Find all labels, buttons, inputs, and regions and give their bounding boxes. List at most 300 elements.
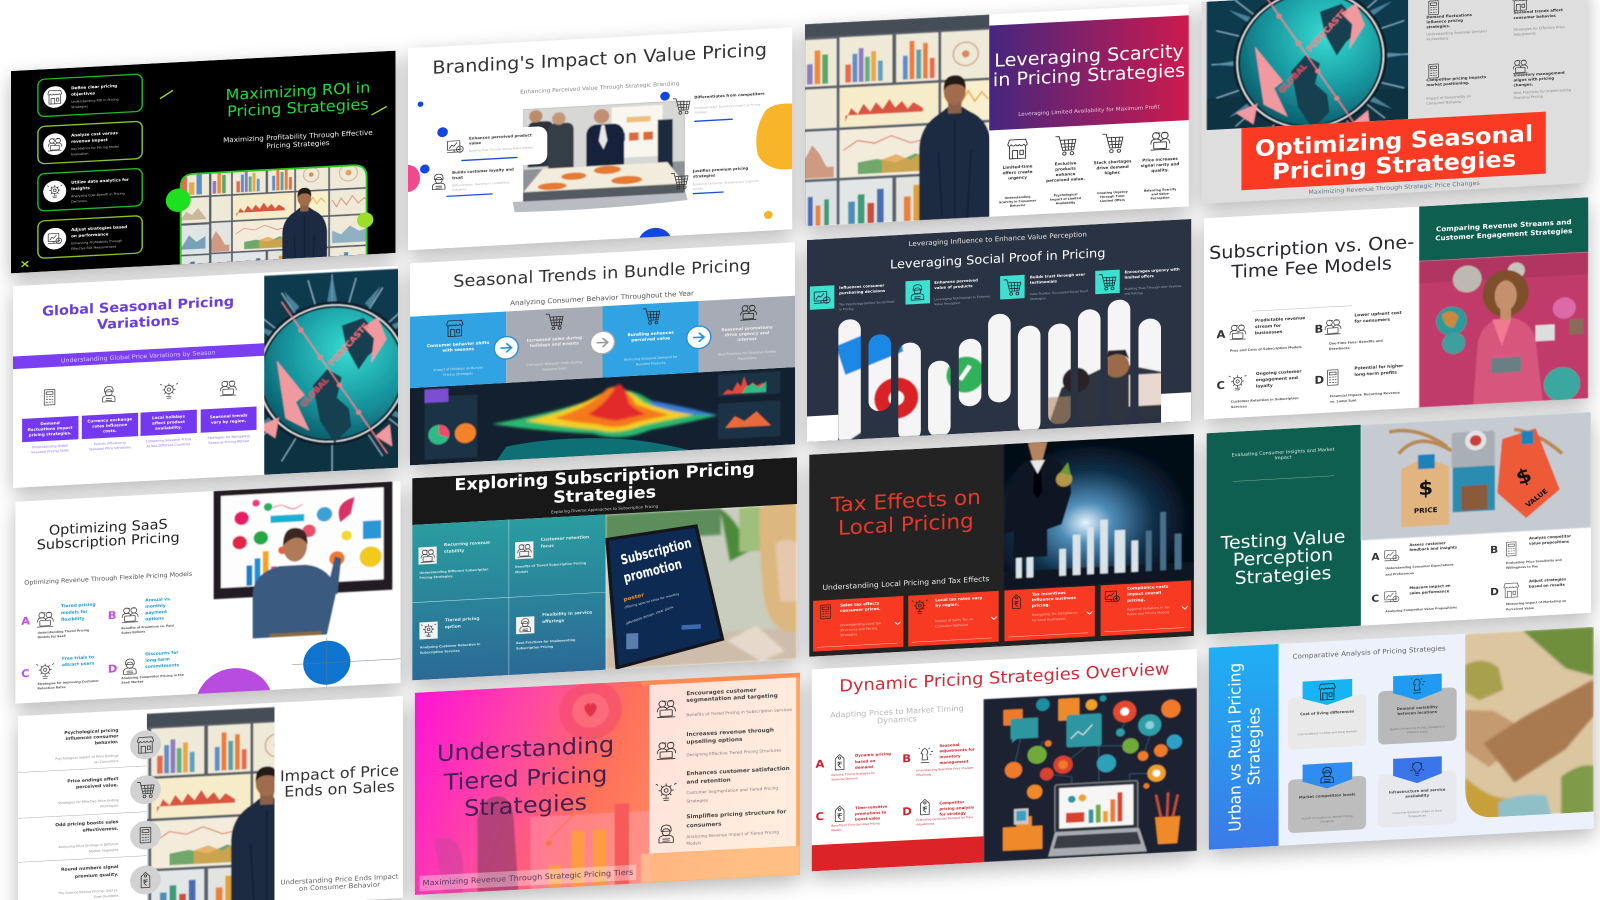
- price tag labels: [1414, 462, 1550, 515]
- strip: increased sales: Increased sales during: [527, 335, 582, 343]
- item A: flexibility: [61, 616, 85, 623]
- item C: attract users: [62, 661, 95, 668]
- red band: [812, 836, 984, 871]
- card: infrastructure: Perspectives: [1408, 813, 1427, 818]
- item B: Evaluating Price Sensitivity and: [1506, 558, 1562, 565]
- item A: [1216, 315, 1305, 354]
- item: simplifies: Analyzing Revenue Impact of Tiered Pricing: [686, 829, 779, 839]
- item D: [1490, 577, 1567, 612]
- card: local tax rates: Impact of Sales Tax on: [935, 617, 973, 623]
- item: builds trust: Builds trust through user: [1030, 273, 1085, 279]
- item: price increases: signal rarity and: [1141, 161, 1180, 168]
- strip: promotions: Best Practices for Seasonal Bundle: [718, 350, 776, 357]
- card: cost of living: Cost of living differences: [1300, 710, 1355, 716]
- title: Tiered Pricing: [443, 761, 607, 796]
- item: urgency: Encourages urgency with: [1125, 267, 1180, 274]
- item: demand fluctuations: Demand fluctuations: [1426, 13, 1473, 19]
- item: round numbers: Even Numbers: [94, 894, 119, 899]
- item: flexibility: Subscription Pricing: [516, 645, 553, 650]
- item: holidays: Across Different Countries: [147, 442, 191, 448]
- card: adjust strategies: Enhancing Profitability through: [71, 239, 122, 245]
- image: price and value tags: [1361, 412, 1591, 540]
- item: enhances: value of products: [934, 284, 973, 290]
- subtitle: Understanding Local Pricing and Tax Effects: [822, 574, 989, 592]
- item A: stream for: [1255, 323, 1282, 330]
- card: infrastructure: Infrastructure and service: [1389, 788, 1446, 795]
- strip: increased sales: [506, 306, 603, 383]
- item B: payment: [145, 609, 167, 616]
- title: Seasonal Trends in Bundle Pricing: [453, 256, 751, 292]
- item D: commitments: [145, 662, 180, 670]
- image: presenter at screen: [214, 481, 392, 641]
- subtitle: Pricing Strategies: [266, 139, 330, 150]
- item: differentiates: Differentiates from competitors: [694, 91, 765, 100]
- item: loyalty: Industries: [452, 187, 467, 192]
- item: seasonal trends: vary by region.: [211, 418, 247, 425]
- item: stock shortages: Through Time-: [1100, 194, 1126, 199]
- item C: [1216, 369, 1303, 410]
- image: woman in pink suit: [1419, 252, 1588, 409]
- item: stock shortages: drive demand: [1096, 164, 1129, 170]
- item C: C: [1216, 379, 1225, 392]
- item: currency: Currency exchange: [87, 416, 132, 424]
- item: seasonal trends: [201, 380, 257, 445]
- item: satisfaction: Customer Segmentation and Tiered Pricing: [686, 785, 778, 795]
- item B: Effectively: [916, 772, 932, 777]
- strip: promotions: interest: [737, 336, 757, 342]
- title: Subscription Pricing: [37, 530, 180, 553]
- image: globe: [1206, 0, 1408, 130]
- item: competitor pricing: Impact of Seasonality on: [1426, 94, 1471, 101]
- item A: A: [1216, 328, 1226, 341]
- item: flexibility: [516, 610, 592, 650]
- title: Pricing Strategies: [227, 96, 369, 121]
- strip: bundling: Bundling enhances: [627, 330, 674, 337]
- item: satisfaction: Strategies: [686, 798, 708, 804]
- item: holidays: affect product: [152, 419, 185, 426]
- card: market competition: Impact of Location on Market Pricing: [1302, 814, 1353, 820]
- header panel: Customer Engagement Strategies: [1435, 227, 1572, 242]
- strip: bundling: perceived value: [631, 335, 670, 342]
- card: adjust strategies: on performance: [71, 231, 109, 238]
- item: currency: [82, 385, 138, 452]
- slide: Leveraging Social Proof in Pricing: [807, 219, 1191, 447]
- slide: Optimizing Seasonal Pricing Strategies: [1202, 0, 1587, 204]
- title: Variations: [97, 313, 179, 333]
- left title panel: [1209, 644, 1279, 850]
- item A: Dynamic Pricing Strategies for: [831, 771, 876, 777]
- card: tax incentives: Navigating Tax Compliance: [1032, 611, 1077, 617]
- strip: bundling: [603, 301, 699, 378]
- price tag labels: $: [1512, 463, 1535, 490]
- image: businessman over glowing city: [1004, 434, 1194, 590]
- card: demand variability: Demand variability: [1397, 705, 1438, 711]
- item C: engagement and: [1256, 375, 1298, 383]
- item: simplifies: Simplifies pricing structure for: [686, 809, 786, 820]
- item: upselling: Increases revenue through: [686, 728, 774, 738]
- item A: [1371, 541, 1458, 577]
- item: influences: in Pricing: [839, 307, 854, 311]
- item C: Analyzing Competitor Value Propositions: [1385, 605, 1457, 613]
- item: flexibility: Flexibility in service: [542, 610, 592, 618]
- strip: increased sales: Seasonal Sales: [542, 366, 567, 372]
- item: odd pricing: Analyzing Price Endings in Different: [59, 842, 119, 849]
- item: limited-time: [999, 139, 1037, 208]
- title: Strategies: [464, 789, 587, 822]
- item B: value propositions: [1529, 540, 1570, 546]
- item: stock shortages: [1094, 133, 1132, 203]
- item B: [108, 596, 174, 636]
- item: currency: costs.: [103, 428, 117, 434]
- subtitle: Leveraging Limited Availability for Maximum Profit: [1018, 105, 1160, 118]
- item: limited-time: offers create: [1003, 169, 1033, 175]
- item: psychological: [55, 728, 119, 766]
- item: price endings: perceived value.: [76, 782, 119, 790]
- item: retention: focus: [541, 543, 554, 550]
- strip: consumer behavior: with seasons: [442, 346, 475, 353]
- title: Strategies: [1235, 563, 1331, 589]
- subtitle: Exploring Diverse Approaches to Subscription Pricing: [551, 504, 659, 514]
- item: recurring revenue: Pricing Strategies: [419, 574, 453, 580]
- item: psychological: Psychological Impact of Price Endings: [55, 754, 119, 761]
- item: perceived value: value: [469, 140, 481, 146]
- card: local tax rates: [908, 591, 999, 646]
- title: Leveraging Social Proof in Pricing: [890, 245, 1105, 272]
- card: define objectives: Define clear pricing: [71, 83, 117, 90]
- item: exclusive: enhance: [1056, 171, 1076, 177]
- arrow circles: [494, 325, 711, 360]
- circle with crosshair: [292, 634, 400, 689]
- slide: Dynamic Pricing Strategies Overview: [812, 649, 1197, 871]
- item: influences: [810, 282, 895, 313]
- item B: [1490, 534, 1571, 571]
- image: analyst viewing chart wall: [805, 14, 990, 226]
- item D: SaaS Market: [121, 680, 144, 685]
- image: rainbow dashboard: [410, 367, 795, 465]
- card: define objectives: objectives: [71, 91, 96, 97]
- item: satisfaction: Enhances customer satisfaction: [686, 766, 790, 777]
- item C: Benefits of Time-Sensitive Pricing: [831, 821, 880, 828]
- item: inventory: Seasonal Pricing: [1514, 95, 1543, 100]
- item C: C: [21, 667, 30, 680]
- strip: consumer behavior: Consumer behavior shifts: [427, 340, 490, 348]
- card: cost versus revenue: [38, 121, 142, 164]
- item B: B: [1490, 545, 1498, 556]
- dividers: [18, 766, 147, 862]
- item: segmentation: Encourages customer: [686, 688, 757, 697]
- item C: Customer Retention in Subscription: [1231, 396, 1299, 404]
- item: currency: Seasonal Price Variations: [89, 445, 131, 451]
- gradient banner: [989, 15, 1189, 130]
- card: data analytics: Decisions: [71, 199, 87, 204]
- item A: models for: [61, 609, 89, 616]
- item B: B: [1314, 323, 1323, 336]
- item: price endings: Strategies for Effective Price Ending: [58, 798, 119, 805]
- item: upselling: [657, 727, 781, 759]
- item: simplifies: Models: [686, 840, 701, 846]
- item B: Willingness to Pay: [1506, 564, 1538, 570]
- card: sales tax: Strategies: [840, 632, 857, 637]
- item: urgency: [1095, 266, 1182, 297]
- card: market competition: Market competition levels: [1299, 793, 1356, 800]
- item C: promotions to: [855, 810, 887, 816]
- card: cost versus revenue: Analyze cost versus: [71, 130, 118, 138]
- slide: Global Seasonal Pricing Variations: [13, 266, 398, 488]
- item: simplifies: consumers: [686, 822, 722, 829]
- right panel: [649, 677, 796, 854]
- item: seasonal trends: Strategies for Navigating: [208, 434, 250, 440]
- item: limited-time: Behavior: [1010, 203, 1026, 208]
- price tag labels: VALUE: [1524, 487, 1550, 509]
- image: laptop with subscription promotion: offering special rates for monthly: [624, 592, 680, 609]
- card: define objectives: Strategies: [71, 104, 88, 109]
- item: psychological: behavior.: [95, 739, 119, 746]
- item: price increases: [1141, 131, 1180, 201]
- item C: Retention Rates: [37, 685, 66, 691]
- title: Ends on Sales: [284, 778, 395, 801]
- item C: Free trials to: [62, 654, 94, 662]
- item A: and Preferences: [1385, 571, 1414, 577]
- item: flexibility: offerings: [542, 618, 565, 625]
- item: demand: pricing strategies.: [29, 430, 72, 437]
- card: adjust strategies: Effective ROI Measurement: [71, 245, 117, 251]
- item B: Benefits of Freemium vs. Paid: [121, 624, 174, 630]
- item A: Tiered pricing: [61, 602, 96, 609]
- subtitle: on Consumer Behavior: [299, 881, 380, 893]
- item: price increases: Price increases: [1142, 156, 1178, 163]
- item: enhances: Enhances perceived: [934, 278, 978, 285]
- item B: monthly: [145, 603, 166, 610]
- item A: businesses: [1255, 329, 1283, 336]
- item: round numbers: premium quality.: [75, 872, 119, 880]
- title banner: Optimizing Seasonal: [1255, 121, 1533, 162]
- card: demand variability: between locations: [1397, 710, 1438, 716]
- item D: for strategy: [939, 810, 966, 817]
- item C: C: [1371, 594, 1379, 605]
- card: compliance: Regional Variations in Tax: [1127, 605, 1170, 611]
- item A: Seasonal Demand: [831, 776, 858, 781]
- item: price increases: quality.: [1151, 167, 1169, 173]
- item B: Lower upfront cost: [1354, 310, 1402, 318]
- slide: Maximizing ROI in Pricing Strategies: [11, 51, 395, 292]
- strip: bundling: Bundled Products: [636, 361, 666, 366]
- image: laptop with subscription promotion: poster: [623, 592, 645, 603]
- item: exclusive: products: [1055, 166, 1077, 172]
- item B: B: [108, 609, 117, 622]
- strip: increased sales: Consumer Behavior Shifts During: [526, 360, 582, 367]
- item: tiered: Subscription Services: [420, 649, 460, 655]
- item: seasonal trends: [1513, 0, 1565, 37]
- card: cost versus revenue: Evaluation: [71, 152, 89, 156]
- slide: Impact of Price Ends on Sales: [18, 696, 403, 900]
- card: sales tax: consumer prices.: [840, 606, 881, 613]
- title: Branding's Impact on Value Pricing: [432, 40, 767, 79]
- item: retention: Benefits of Tiered Subscription Pricing: [515, 561, 586, 569]
- card: market competition: [1288, 761, 1366, 833]
- item: stock shortages: Limited Offers: [1100, 198, 1125, 203]
- item: competitor pricing: Consumer Behavior: [1426, 100, 1462, 106]
- item: exclusive: Exclusive: [1055, 160, 1077, 166]
- image: laptop with subscription promotion: promotion: [622, 556, 683, 586]
- card: data analytics: Analyzing Cost-Benefit in Pricing: [71, 192, 125, 198]
- heading: Comparative Analysis of Pricing Strategies: [1292, 645, 1446, 661]
- item: builds trust: Strategies: [1030, 296, 1046, 301]
- item: seasonal trends: Seasonal trends: [210, 413, 248, 419]
- item D: Discounts for: [145, 650, 179, 657]
- item D: long-term profits: [1354, 370, 1397, 378]
- slide: Exploring Subscription Pricing Strategies: [412, 457, 797, 680]
- item B: Analyze competitor: [1529, 534, 1571, 540]
- title: Subscription vs. One-: [1209, 233, 1414, 264]
- card: data analytics: [38, 168, 142, 211]
- item: retention: [515, 534, 589, 574]
- item: influences: The Psychology Behind Social Proof: [838, 300, 895, 307]
- item: recurring revenue: Recurring revenue: [444, 540, 490, 548]
- item: limited-time: Understanding: [1005, 195, 1031, 200]
- item: loyalty: Builds customer loyalty and: [452, 167, 514, 175]
- item B: [1314, 310, 1402, 352]
- item: simplifies: [659, 809, 786, 847]
- subtitle: Leveraging Influence to Enhance Value Perception: [909, 231, 1087, 248]
- item: premium: strategies: [693, 173, 716, 179]
- item C: sales performance: [1409, 589, 1450, 595]
- subtitle: Optimizing Revenue Through Flexible Pricing Models: [24, 571, 192, 587]
- item: psychological: Psychological pricing: [64, 728, 119, 736]
- item D: Competitor: [939, 799, 964, 805]
- item: enhances: Value Perception: [934, 301, 960, 306]
- item: demand fluctuations: influence pricing: [1426, 19, 1463, 24]
- item: upselling: Designing Effective Tiered Pricing Structures: [686, 748, 781, 757]
- item A: Understanding Tiered Pricing: [37, 628, 89, 635]
- strip: consumer behavior: Impact of Holidays on Bundle: [433, 366, 483, 372]
- item: currency: rates influence: [92, 422, 127, 429]
- item: price endings: Techniques: [99, 804, 119, 808]
- divider: [1252, 305, 1352, 312]
- subtitle: Impact: [1274, 455, 1292, 461]
- item: psychological: on Consumers: [94, 759, 119, 764]
- item: seasonal trends: Strategies for Effective Price: [1514, 25, 1565, 32]
- price tag labels: PRICE: [1414, 506, 1438, 515]
- card: sales tax: Sales tax effects: [840, 601, 880, 608]
- image: globe: [264, 268, 398, 475]
- item: enhances: Leveraging Testimonials to Enhance: [934, 294, 990, 301]
- left title panel: Strategies: [1244, 707, 1264, 786]
- item B: options: [145, 616, 164, 622]
- caption strip: Maximizing Revenue Through Strategic Pricing Tiers: [423, 868, 633, 888]
- image: laptop with subscription promotion: [606, 502, 797, 670]
- item: limited-time: Limited-time: [1003, 164, 1033, 170]
- item: tiered: option: [445, 624, 461, 630]
- title: Testing Value: [1220, 527, 1345, 554]
- purple semicircle: [195, 666, 272, 742]
- title: Understanding: [437, 732, 614, 767]
- laptop with meeting photo: [512, 100, 688, 212]
- card: adjust strategies: Adjust strategies based: [71, 224, 127, 232]
- strip: promotions: drive urgency and: [725, 330, 769, 337]
- card: tax incentives: pricing.: [1032, 602, 1050, 608]
- item C: Models: [831, 828, 842, 832]
- card: adjust strategies: [38, 216, 142, 258]
- item C: [21, 654, 99, 691]
- item: urgency: and Ratings: [1125, 291, 1143, 296]
- icon badges: [130, 730, 161, 895]
- item: demand: fluctuations impact: [27, 425, 73, 432]
- item B: Annual vs.: [145, 596, 172, 603]
- item: demand: Seasonal Pricing Shifts: [31, 449, 69, 454]
- item: demand: [22, 388, 78, 455]
- item D: Potential for higher: [1354, 363, 1404, 372]
- item: influences: Influences consumer: [839, 284, 884, 290]
- item: segmentation: Benefits of Tiered Pricing in Subscription Services: [686, 707, 792, 717]
- image: handshake over map: [1465, 627, 1594, 822]
- item: demand: Understanding Global: [32, 444, 68, 449]
- image: analyst viewing chart wall: [59, 702, 377, 900]
- item: demand fluctuations: strategies.: [1426, 24, 1451, 29]
- item A: Dynamic pricing: [855, 751, 891, 758]
- title: Maximizing ROI in: [226, 79, 370, 104]
- slide: Seasonal Trends in Bundle Pricing: [410, 242, 795, 465]
- item: holidays: Local holidays: [152, 414, 186, 420]
- item B: B: [902, 752, 911, 765]
- card: compliance: Rates and Pricing Models: [1127, 610, 1169, 616]
- strip: consumer behavior: Pricing Strategies: [443, 371, 473, 377]
- item A: Pros and Cons of Subscription Models: [1230, 345, 1302, 353]
- item: exclusive: Impact of Limited: [1050, 196, 1081, 202]
- item: competitor pricing: [1426, 61, 1487, 106]
- item: limited-time: Scarcity in Consumer: [999, 198, 1037, 204]
- card: infrastructure: availability: [1405, 793, 1430, 799]
- item D: vs. Lump Sum: [1330, 398, 1357, 404]
- card: tax incentives: influence business: [1032, 595, 1077, 602]
- title: Exploring Subscription Pricing: [454, 459, 755, 495]
- item C: boost sales: [855, 815, 881, 822]
- item: perceived value: Building Trust Through Strong Brand Identity: [469, 145, 533, 153]
- slide: Tax Effects on Local Pricing: [809, 434, 1194, 657]
- item: odd pricing: effectiveness.: [83, 826, 119, 834]
- item: tiered: Analyzing Customer Retention in: [420, 642, 480, 649]
- image: laptop with subscription promotion: Subscription: [619, 535, 693, 568]
- item: inventory: changes.: [1514, 82, 1534, 87]
- item: competitor pricing: Competitor pricing impacts: [1426, 75, 1487, 82]
- item: round numbers: The Science Behind Pricing: Odd vs.: [57, 888, 119, 895]
- item A: Predictable revenue: [1255, 315, 1305, 324]
- card: compliance: impact overall: [1127, 590, 1162, 597]
- item: recurring revenue: stability: [444, 548, 465, 555]
- item D: [902, 797, 975, 827]
- subtitle: Dynamics: [877, 714, 917, 725]
- item: differentiates: Strategy: [694, 110, 707, 114]
- strip: promotions: Seasonal promotions: [721, 324, 773, 332]
- item: price endings: [58, 776, 119, 811]
- title: Perception: [1233, 545, 1333, 571]
- item: odd pricing: Odd pricing boosts sales: [55, 819, 119, 828]
- strip: bundling: Analyzing Seasonal Demand for: [624, 355, 678, 362]
- item C: [816, 804, 888, 833]
- strip: increased sales: holidays and events: [530, 340, 579, 348]
- subtitle: Understanding Price Ends Impact: [280, 873, 399, 887]
- item: holidays: availability.: [155, 425, 182, 431]
- item: segmentation: [657, 686, 792, 719]
- item D: Financial Impact: Recurring Revenue: [1330, 391, 1401, 398]
- slide: Understanding Tiered Pricing Strategies: [415, 670, 800, 895]
- card: tax incentives: for Local Businesses: [1032, 617, 1066, 622]
- item: price increases: and Value: [1151, 192, 1169, 196]
- item B: adjustments for: [939, 747, 975, 753]
- card: define objectives: Understanding ROI in Pricing: [71, 97, 119, 104]
- item: round numbers: Round numbers signal: [61, 864, 119, 873]
- item: currency: Factors Influencing: [94, 441, 126, 446]
- card: demand variability: Factors Influencing Pricing Strategies in: [1390, 724, 1445, 731]
